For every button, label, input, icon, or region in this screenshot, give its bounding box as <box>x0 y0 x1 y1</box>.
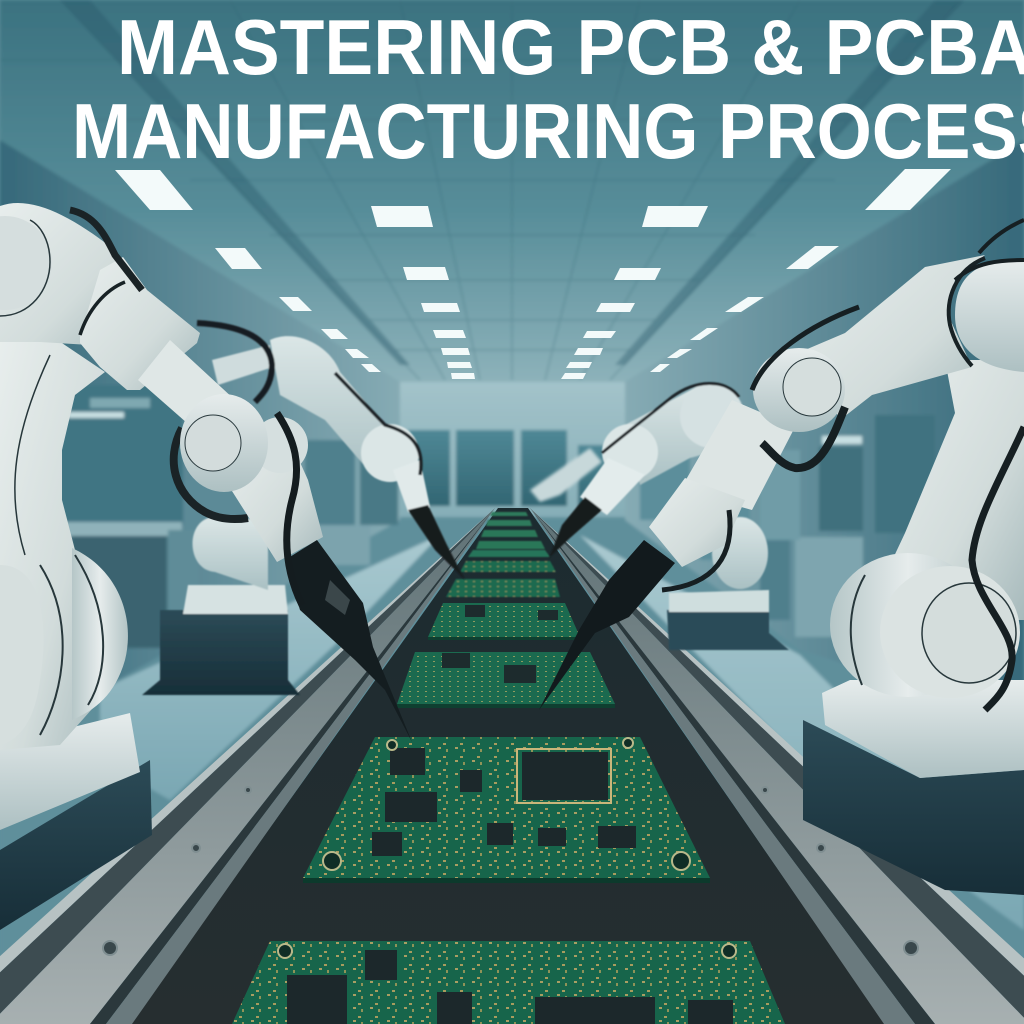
robot: mid right <box>549 383 789 650</box>
board 1 <box>303 737 710 883</box>
base <box>0 713 140 830</box>
lower joint <box>830 553 986 697</box>
base <box>669 590 769 612</box>
upper arm <box>80 257 200 390</box>
cable: forearm <box>277 413 302 605</box>
board 3 <box>428 603 580 640</box>
left rail <box>0 508 495 1024</box>
robot: far right <box>530 448 602 502</box>
pedestal <box>803 720 1024 895</box>
forearm <box>138 340 235 430</box>
ceiling lights <box>115 169 951 379</box>
right wall <box>625 140 1024 720</box>
back wall <box>400 382 625 517</box>
cables <box>197 323 272 402</box>
shoulder <box>955 261 1024 372</box>
robot: large left <box>0 203 412 930</box>
title <box>72 3 1024 175</box>
wrist <box>649 478 745 567</box>
pedestal <box>0 760 152 930</box>
wrist <box>225 440 323 562</box>
column <box>889 360 1024 620</box>
floor <box>100 535 440 800</box>
arm <box>212 345 270 385</box>
tool <box>549 497 602 558</box>
base <box>183 585 288 614</box>
cable: top <box>70 210 142 290</box>
tool <box>408 505 465 580</box>
rail bolts <box>103 787 918 955</box>
cable: elbow loop <box>174 428 248 519</box>
column <box>0 335 105 750</box>
robot: mid left <box>142 323 465 695</box>
base <box>822 680 1024 778</box>
cable <box>602 383 739 453</box>
pedestal <box>667 610 789 650</box>
elbow <box>180 394 268 492</box>
PCB boards <box>232 512 785 1024</box>
right windows <box>640 415 1024 637</box>
cables <box>662 220 1024 710</box>
board small far <box>446 512 560 597</box>
tool <box>539 540 675 710</box>
pedestal <box>142 610 300 695</box>
left wall <box>0 140 400 720</box>
ceiling <box>0 0 1024 382</box>
elbow <box>753 348 845 432</box>
robot: large right <box>539 220 1024 895</box>
forearm <box>680 400 795 510</box>
right rail <box>530 508 1024 1024</box>
lower joint <box>72 548 128 720</box>
chips <box>372 748 636 856</box>
conveyor <box>0 508 1024 1024</box>
back windows <box>408 430 608 510</box>
shoulder <box>0 203 138 345</box>
tool <box>285 540 412 742</box>
arm <box>625 385 738 485</box>
board 2 <box>397 652 615 708</box>
belt <box>130 508 885 1024</box>
board 0 <box>232 941 785 1024</box>
upper arm <box>805 255 985 420</box>
left windows <box>58 385 398 648</box>
